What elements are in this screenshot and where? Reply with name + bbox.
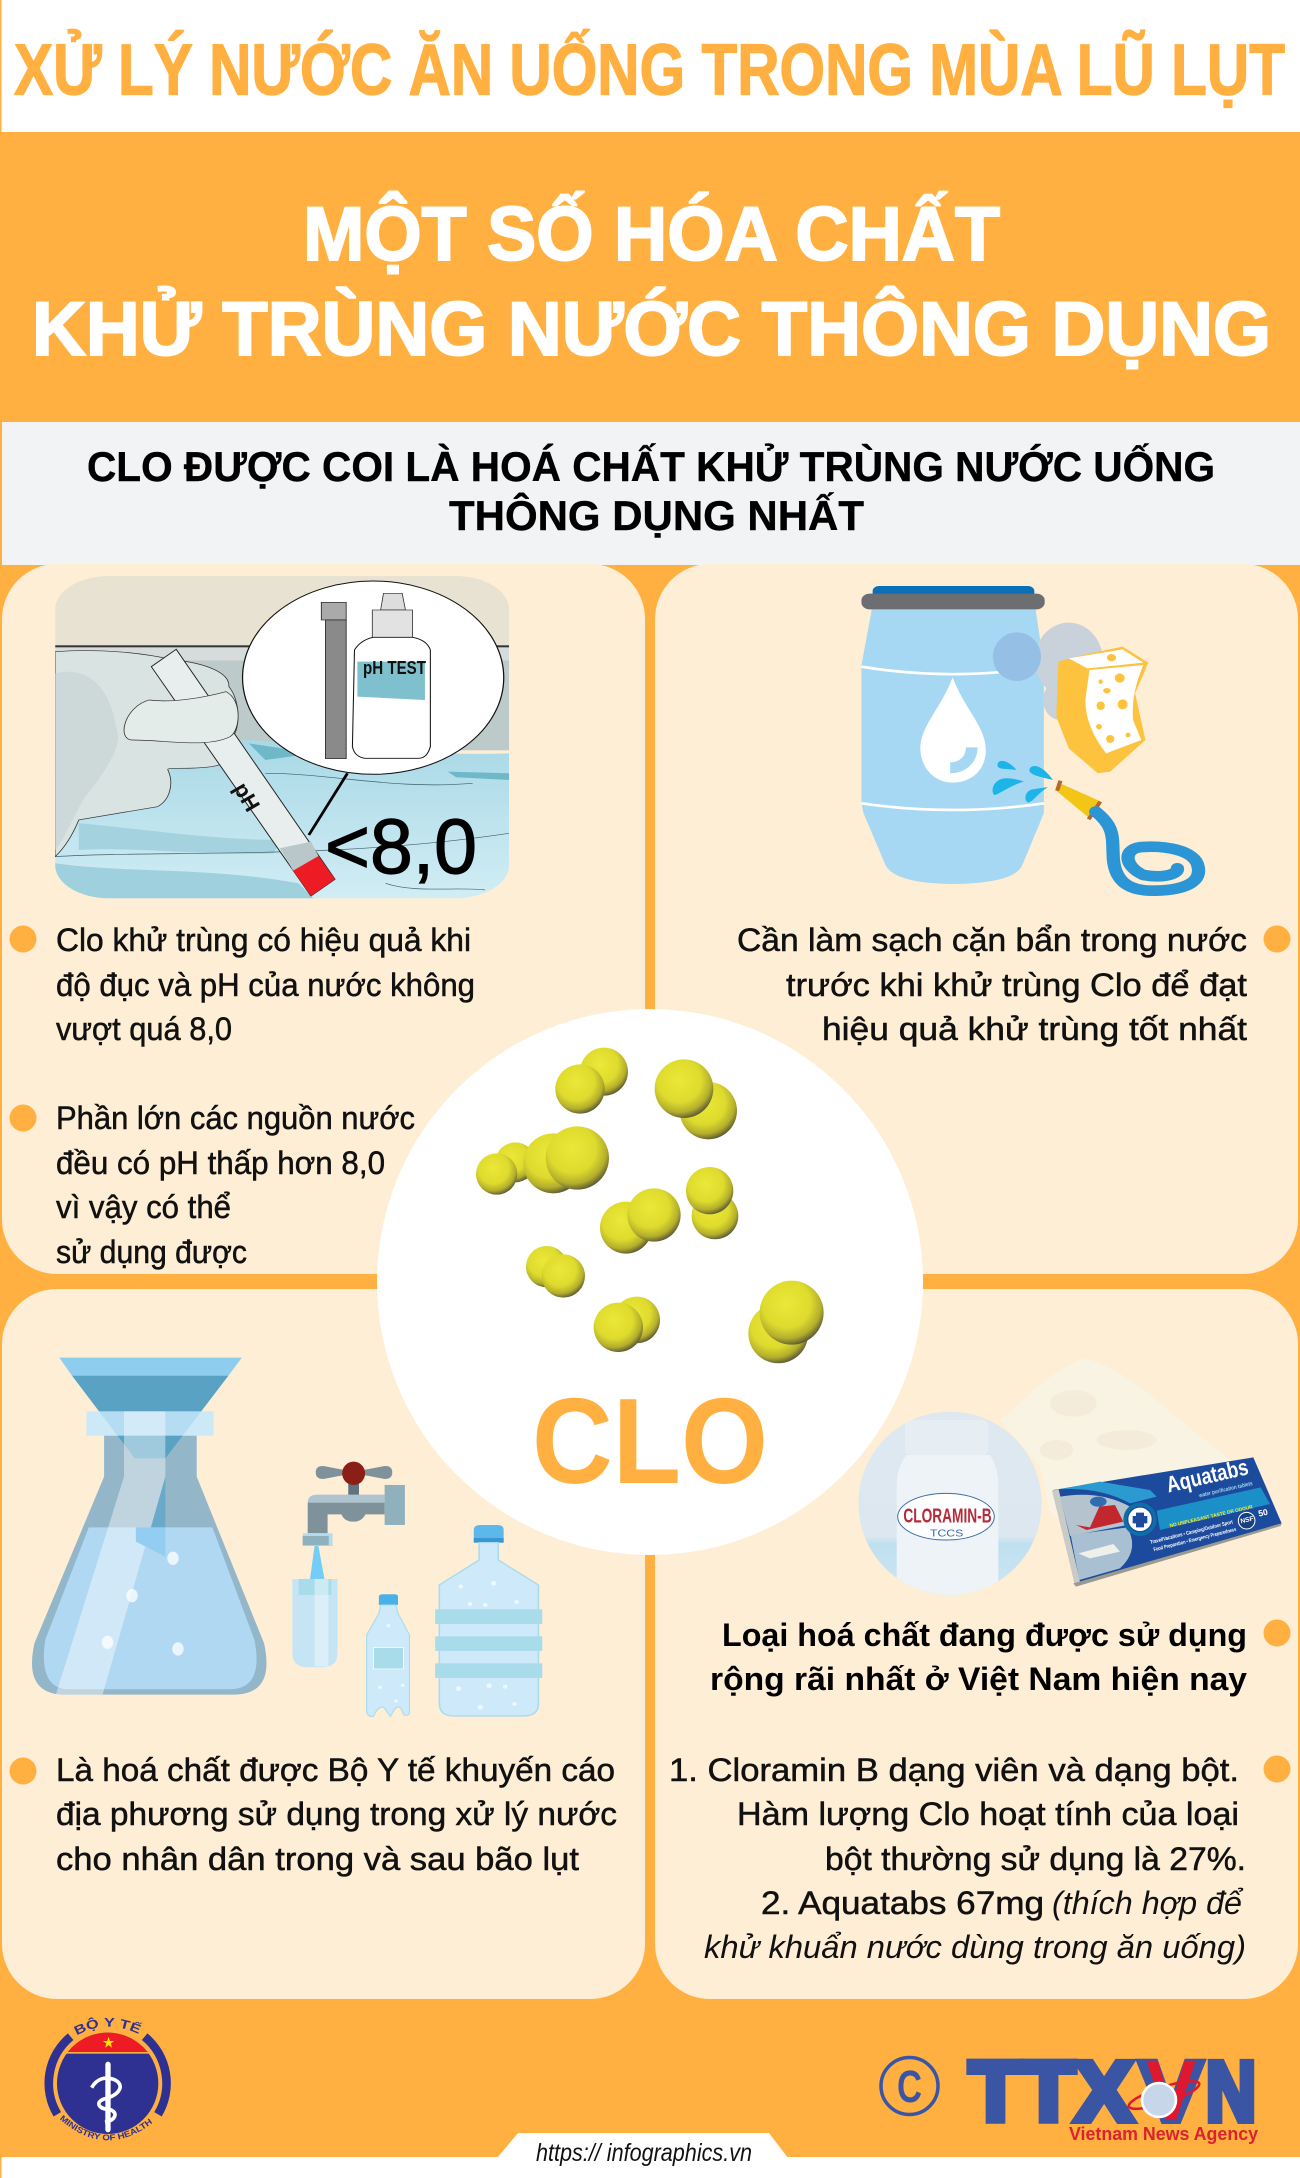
text: recommended by ministry: Là hoá chất được Bộ Y tế khuyến cáo: [56, 1752, 615, 1788]
logo: Ministry of Health: MINISTRY OF HEALTH: [60, 2115, 152, 2140]
illustration: powder and Cloramin-B bottle: [858, 1358, 1240, 1600]
logo: TTXVN: [969, 2043, 1258, 2144]
footer: white strip with URL tab: [2, 2133, 1300, 2178]
text: chemical list: (thích hợp để: [1052, 1885, 1244, 1921]
text: turbidity: [56, 922, 475, 1047]
text: turbidity: độ đục và pH của nước không: [56, 967, 475, 1003]
text: chemical list: bột thường sử dụng là 27%.: [825, 1841, 1246, 1877]
subheading band: [2, 422, 1300, 565]
logo text: BỘ Y TẾ: [74, 2017, 142, 2035]
text: water sources: đều có pH thấp hơn 8,0: [56, 1145, 385, 1181]
text: water sources: vì vậy có thể: [56, 1189, 231, 1225]
text: clean sediment: trước khi khử trùng Clo để đạt: [786, 967, 1247, 1003]
text: clean sediment: [737, 922, 1247, 1047]
illustration: powder and Cloramin-B bottle: TCCS: [930, 1529, 964, 1540]
illustration: barrel, sponge and hose: [861, 586, 1199, 891]
logo: TTXVN: N: [1206, 2044, 1256, 2138]
label: pH TEST: pH TEST: [363, 658, 426, 678]
text: turbidity: vượt quá 8,0: [56, 1011, 232, 1047]
illustration: Aquatabs box: [1052, 1453, 1282, 1587]
bullet: [1264, 1620, 1290, 1646]
center circle with molecules: [377, 1009, 923, 1555]
panel: chemicals in use: [655, 1289, 1298, 1999]
label: pH strip: pH: [229, 778, 265, 816]
text: recommended by ministry: [56, 1752, 617, 1877]
text: widely used: [710, 1617, 1247, 1697]
illustration: Aquatabs box: 50: [1257, 1507, 1269, 1519]
bullet: [10, 1104, 36, 1132]
illustration: flask, tap and bottles: [32, 1358, 542, 1717]
text: recommended by ministry: địa phương sử dụng trong xử lý nước: [56, 1796, 617, 1832]
box brand: Aquatabs: [1164, 1453, 1251, 1498]
panel: cleaning: [655, 564, 1298, 1274]
text: chemical list: Hàm lượng Clo hoạt tính của loại: [737, 1796, 1239, 1832]
CLO label: CLO: [532, 1373, 768, 1509]
illustration: pH test: [55, 576, 509, 900]
text: clean sediment: hiệu quả khử trùng tốt nhất: [822, 1011, 1247, 1047]
text: water sources: Phần lớn các nguồn nước: [56, 1100, 415, 1136]
molecules: [476, 1048, 824, 1363]
box small print: Food Preparation • Emergency Preparedness: [1153, 1527, 1237, 1553]
bullet: [10, 926, 36, 952]
illustration: powder and Cloramin-B bottle: CLORAMIN-B: [903, 1505, 992, 1528]
box small print: water purification tablets: [1198, 1481, 1253, 1499]
left edge line: [0, 0, 2, 2178]
logo: TTXVN: Vietnam News Agency: [1069, 2124, 1258, 2144]
label: below 8,0: <8,0: [325, 802, 477, 890]
panel: recommendation: [2, 1289, 645, 1999]
illustration: Aquatabs box: NSF: [1240, 1515, 1254, 1525]
text: clean sediment: Cần làm sạch cặn bẩn trong nước: [737, 922, 1247, 958]
logo: TTXVN: TTX: [969, 2044, 1133, 2138]
heading: KHỬ TRÙNG NƯỚC THÔNG DỤNG: [32, 287, 1271, 372]
bullet: [1264, 926, 1290, 952]
footer: white strip with URL tab: https:// infographics.vn: [536, 2139, 752, 2167]
logo: TTXVN: V: [1146, 2043, 1196, 2137]
copyright symbol: [881, 2058, 938, 2114]
text: chemical list: 1. Cloramin B dạng viên và dạng bột.: [669, 1752, 1239, 1788]
copyright symbol: C: [897, 2061, 922, 2112]
heading: MỘT SỐ HÓA CHẤT: [303, 192, 1000, 277]
text: widely used: rộng rãi nhất ở Việt Nam hiện nay: [710, 1661, 1247, 1697]
subheading band: THÔNG DỤNG NHẤT: [449, 491, 864, 539]
text: chemical list: [669, 1752, 1246, 1965]
text: recommended by ministry: cho nhân dân trong và sau bão lụt: [56, 1841, 579, 1877]
logo: Ministry of Health: [44, 2017, 171, 2140]
box small print: NO UNPLEASANT TASTE OR ODOUR: [1169, 1504, 1254, 1529]
box small print: [1150, 1481, 1254, 1553]
star: ★: [102, 2036, 115, 2052]
text: water sources: sử dụng được: [56, 1234, 247, 1270]
panel: pH condition: [2, 564, 645, 1274]
text: chemical list: 2. Aquatabs 67mg: [761, 1885, 1044, 1921]
text: widely used: Loại hoá chất đang được sử dụng: [722, 1617, 1247, 1653]
heading: [32, 192, 1271, 372]
text: water sources: [56, 1100, 415, 1270]
text: turbidity: Clo khử trùng có hiệu quả khi: [56, 922, 471, 958]
text: chemical list: khử khuẩn nước dùng trong ăn uống): [704, 1929, 1246, 1965]
logo: TTXVN: V: [1140, 2044, 1202, 2138]
subheading band: CLO ĐƯỢC COI LÀ HOÁ CHẤT KHỬ TRÙNG NƯỚC UỐNG: [87, 442, 1215, 490]
bullet: [1264, 1756, 1290, 1782]
bullet: [10, 1758, 36, 1784]
box small print: Travel/Vacations • Camping/Outdoor Sport: [1150, 1520, 1234, 1546]
